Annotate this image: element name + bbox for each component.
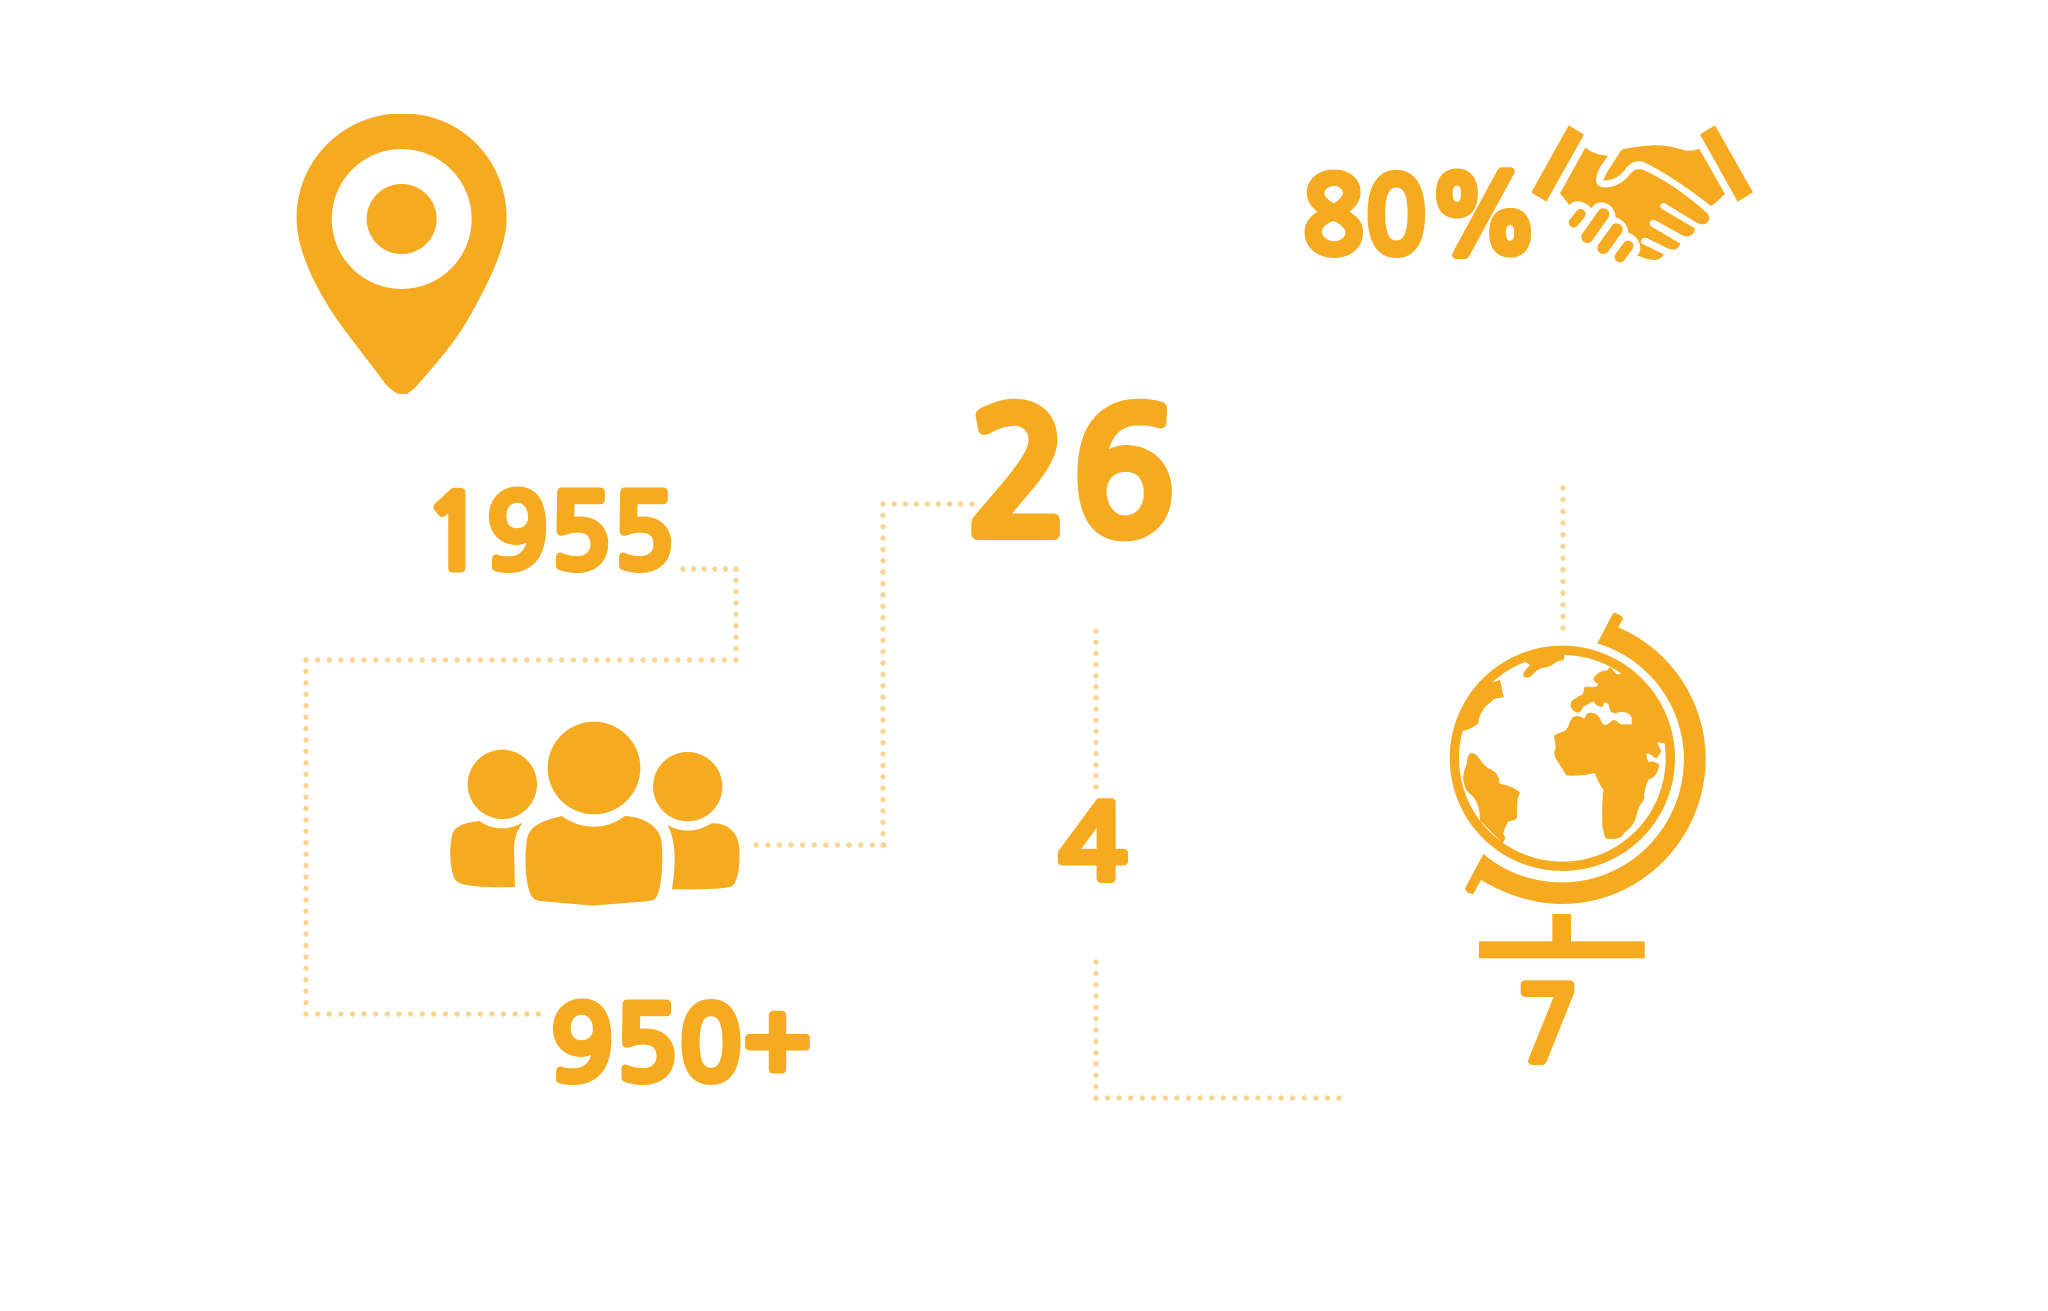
icon: handshake <box>1531 125 1753 260</box>
icon: group of people <box>450 722 740 906</box>
stat: 26: 26 <box>966 390 1176 561</box>
stat: 80%: 80% <box>1302 165 1540 270</box>
icon: map pin <box>297 114 507 394</box>
stat: 7: 7 <box>1517 976 1579 1078</box>
stat: 950+: 950+ <box>550 995 812 1097</box>
icon: desk globe <box>1454 613 1706 958</box>
stat: 1955: 1955 <box>423 483 675 585</box>
stat: 4: 4 <box>1058 794 1128 896</box>
